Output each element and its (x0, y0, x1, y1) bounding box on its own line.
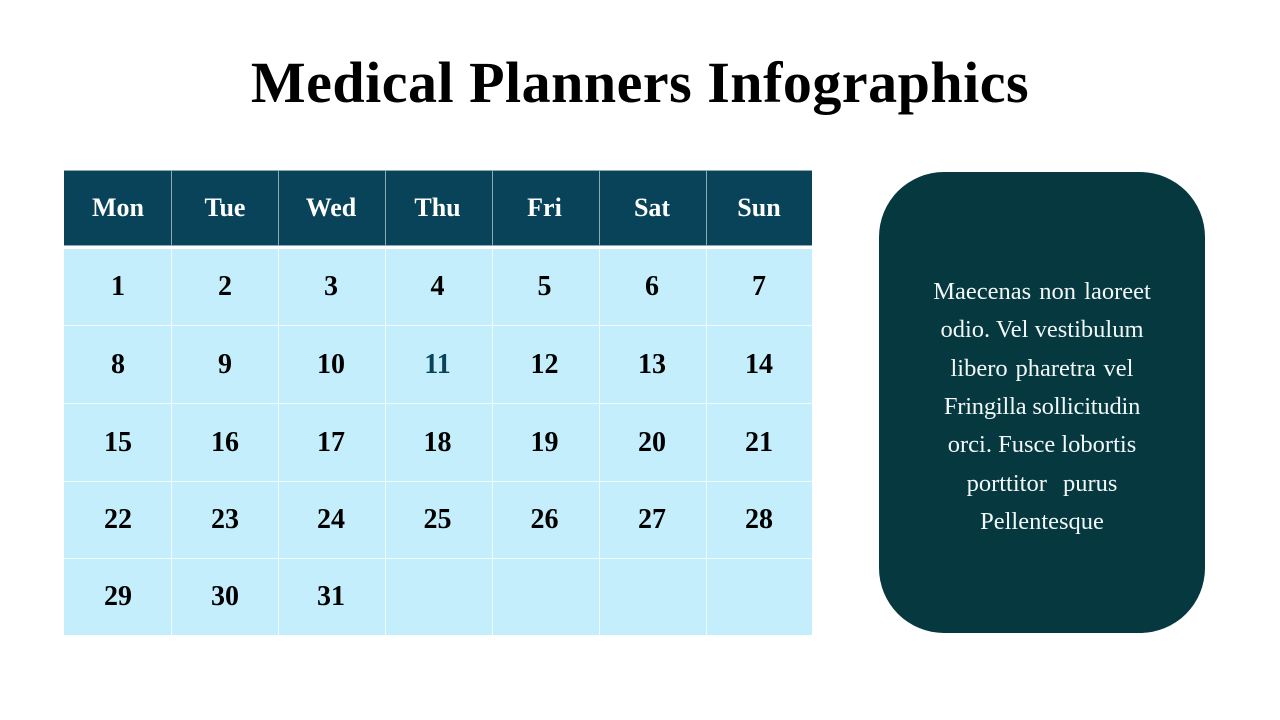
weekday header row (64, 170, 812, 246)
calendar date grid: 4 (430, 271, 444, 302)
weekday header row: Tue (205, 193, 245, 222)
description text: Fringilla sollicitudin (944, 393, 1140, 420)
weekday header row: Fri (527, 193, 562, 222)
calendar date grid: 10 (317, 348, 345, 380)
title: Medical Planners Infographics (251, 50, 1029, 115)
calendar date grid: 28 (745, 504, 773, 535)
calendar date grid: 6 (645, 271, 659, 302)
calendar date grid: 11 (424, 348, 451, 380)
calendar date grid: 1 (111, 271, 125, 302)
calendar date grid: 26 (530, 504, 558, 535)
weekday header row: Thu (414, 193, 461, 222)
calendar date grid: 12 (530, 348, 558, 380)
description text: libero pharetra vel (950, 355, 1133, 382)
calendar date grid (64, 249, 812, 635)
description text: orci. Fusce lobortis (948, 431, 1136, 458)
calendar date grid: 16 (211, 426, 239, 458)
calendar date grid: 24 (317, 504, 345, 535)
calendar date grid: 9 (218, 348, 232, 380)
calendar date grid: 5 (538, 271, 552, 302)
calendar date grid: 3 (324, 271, 338, 302)
description text: odio. Vel vestibulum (940, 316, 1144, 343)
weekday header row: Mon (92, 193, 144, 222)
calendar date grid: 27 (638, 504, 666, 535)
calendar date grid: 30 (211, 581, 239, 612)
weekday header row: Wed (306, 193, 356, 222)
calendar date grid: 22 (104, 504, 132, 535)
calendar date grid: 23 (211, 504, 239, 535)
calendar date grid: 2 (218, 271, 232, 302)
description text: Maecenas non laoreet (933, 278, 1151, 305)
calendar date grid: 8 (111, 348, 125, 380)
weekday header row: Sat (634, 193, 670, 222)
calendar date grid: 20 (638, 426, 666, 458)
description text (933, 278, 1151, 535)
calendar date grid: 18 (424, 426, 452, 458)
calendar date grid: 15 (104, 426, 132, 458)
calendar date grid: 21 (745, 426, 773, 458)
calendar date grid: 13 (638, 348, 666, 380)
calendar date grid: 29 (104, 581, 132, 612)
calendar table (64, 170, 812, 635)
description text: porttitor purus (967, 470, 1117, 497)
panel: description (879, 172, 1205, 633)
weekday header row: Sun (737, 193, 781, 222)
calendar date grid: 17 (317, 426, 345, 458)
calendar date grid: 14 (745, 348, 773, 380)
description text: Pellentesque (980, 508, 1104, 535)
calendar date grid: 25 (424, 504, 452, 535)
calendar date grid: 7 (752, 271, 766, 302)
calendar date grid: 31 (317, 581, 345, 612)
calendar date grid: 19 (530, 426, 558, 458)
